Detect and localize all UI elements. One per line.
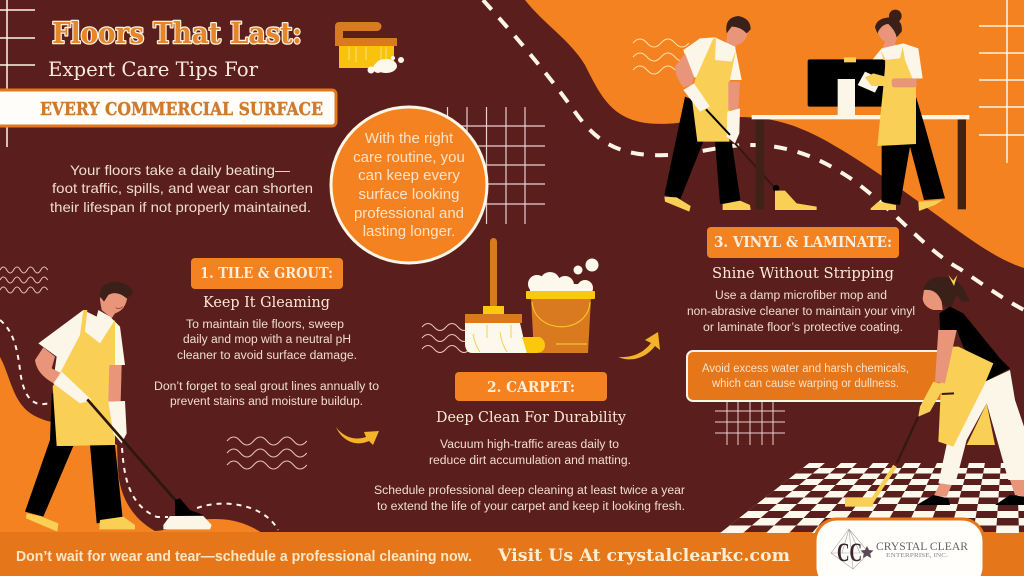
wiping cloth: [858, 72, 882, 93]
section 2 subheading: Deep Clean For Durability: [436, 410, 627, 426]
section 1 body text: daily and mop with a neutral pH: [183, 334, 351, 346]
callout circle: lasting longer.: [363, 223, 455, 240]
section 3: vinyl and laminate: [687, 227, 915, 334]
grid decoration: below callout: [715, 400, 785, 445]
section 3 label: 3. VINYL & LAMINATE:: [714, 233, 892, 251]
dashed path: bottom left: [0, 320, 278, 530]
mop stick: [87, 399, 177, 502]
banner: every commercial surface: [0, 90, 336, 126]
intro text: [50, 162, 313, 215]
warning callout: which can cause warping or dullness.: [711, 378, 899, 390]
waves: beside mop: [422, 324, 470, 352]
checkered floor: [700, 463, 1024, 533]
section 2 body text: to extend the life of your carpet and keep it looking fresh.: [377, 501, 685, 513]
handle behind hand: [942, 390, 954, 397]
mop head: [175, 498, 203, 516]
orange wave: bottom left: [0, 357, 262, 533]
mop handle: [706, 109, 730, 135]
waves: left: [0, 267, 48, 293]
dashed path: top: [483, 0, 1024, 310]
section 1: tile and grout: [154, 258, 379, 408]
head: [889, 10, 902, 22]
section 1 label: [191, 258, 343, 289]
section 3 body text: Use a damp microfiber mop and: [715, 290, 887, 302]
section 2 label: 2. CARPET:: [487, 378, 575, 396]
section 3 body text: or laminate floor’s protective coating.: [703, 322, 903, 334]
warning callout: Avoid excess water and harsh chemicals,: [702, 363, 909, 375]
pants: [882, 93, 945, 205]
gloves: [683, 83, 710, 112]
shirt: [939, 307, 1010, 382]
arrow: section 1 to 2: [336, 427, 379, 445]
figure: woman wiping monitor: [844, 10, 945, 211]
footer call to action: Don’t wait for wear and tear—schedule a professional cleaning now.: [16, 548, 472, 565]
skin ankles: [933, 483, 952, 497]
intro text: foot traffic, spills, and wear can shorten: [52, 180, 313, 196]
figure: man mopping left: [25, 282, 212, 532]
waves: top right: [633, 39, 689, 74]
section 1 body text: prevent stains and moisture buildup.: [170, 396, 363, 408]
mop pad: [845, 497, 873, 507]
shoes: [664, 197, 691, 212]
footer website: Visit Us At crystalclearkc.com: [497, 546, 790, 566]
section 1 body text: Don’t forget to seal grout lines annually to: [154, 381, 379, 393]
section 1 label: 1. TILE & GROUT:: [200, 264, 333, 282]
section 2: carpet: [374, 372, 685, 513]
right arm: [108, 365, 122, 402]
desk top: [752, 115, 969, 119]
glove: [865, 73, 892, 86]
section 2 label: [455, 372, 607, 401]
logo wordmark: CRYSTAL CLEAR: [876, 539, 968, 553]
title line: Floors That Last: Floors That Last:: [52, 16, 302, 50]
shirt: [38, 310, 125, 380]
desk with monitor: [752, 59, 969, 209]
shirt: [873, 43, 923, 79]
arrow: section 2 to 3: [618, 332, 660, 359]
footer bar: [0, 532, 1024, 576]
logo mark: CC: [837, 538, 862, 567]
figure: man mopping top: [664, 16, 817, 212]
arm: [892, 78, 917, 87]
section 1 body text: cleaner to avoid surface damage.: [177, 350, 357, 362]
grid decoration: behind circle: [430, 107, 545, 224]
logo mark: [831, 529, 874, 569]
callout circle: With the right: [365, 130, 454, 147]
apron: [53, 310, 115, 446]
pants: [664, 97, 703, 200]
callout circle: can keep every: [358, 167, 460, 184]
shirt: [683, 37, 742, 83]
shoes: [871, 202, 896, 210]
face: [923, 290, 943, 310]
section 3 body text: [687, 290, 915, 334]
warning callout: [687, 351, 960, 401]
callout circle: care routine, you: [353, 149, 465, 166]
gloves: [53, 372, 92, 403]
callout circle: surface looking: [359, 186, 459, 203]
section 2 body text: Schedule professional deep cleaning at least twice a year: [374, 485, 685, 497]
logo panel: [815, 519, 984, 576]
callout circle: professional and: [354, 205, 464, 222]
intro text: their lifespan if not properly maintained.: [50, 199, 311, 215]
shoes: [26, 513, 58, 532]
section 3 subheading: Shine Without Stripping: [712, 266, 894, 282]
desk legs: [756, 119, 764, 209]
subtitle: Expert Care Tips For: Expert Care Tips For: [48, 57, 258, 81]
pants: [938, 370, 1024, 485]
glove: [918, 382, 945, 417]
callout circle: [331, 107, 487, 263]
waves: bottom centre: [227, 437, 307, 469]
intro text: Your floors take a daily beating—: [70, 162, 290, 178]
apron: [938, 337, 993, 447]
mop pole: [897, 417, 918, 463]
right arm: [728, 82, 740, 110]
scrunchie: [948, 275, 957, 286]
grid decoration: top right: [979, 0, 1024, 163]
apron back: [967, 403, 995, 445]
apron: [692, 38, 736, 142]
footer text: [16, 546, 790, 566]
arm: [935, 330, 957, 383]
section 2 body text: [374, 439, 685, 513]
section 1 body text: To maintain tile floors, sweep: [186, 319, 344, 331]
orange wave: top right: [525, 0, 1024, 268]
shoes: [917, 495, 950, 505]
title: [0, 16, 336, 126]
cloth on monitor: [844, 57, 856, 62]
grid decoration: top left: [0, 0, 35, 147]
section 2 body text: Vacuum high-traffic areas daily to: [440, 439, 619, 451]
section 1 body text: [154, 319, 379, 408]
left arm: [675, 53, 694, 87]
head: [726, 24, 748, 50]
apron: [877, 47, 916, 146]
figure: woman mopping checker floor: [845, 275, 1024, 507]
monitor: [808, 59, 885, 107]
back pants: [25, 393, 73, 517]
section 3 label: [707, 227, 899, 258]
section 3 body text: non-abrasive cleaner to maintain your vinyl: [687, 306, 915, 318]
section 2 body text: reduce dirt accumulation and matting.: [429, 455, 631, 467]
logo subtitle: ENTERPRISE, INC.: [886, 553, 949, 559]
section 1 subheading: Keep It Gleaming: [203, 295, 330, 311]
banner: every commercial surface: EVERY COMMERCIAL SURFACE: [40, 99, 323, 120]
icon: scrub brush: [335, 22, 404, 74]
mop: [773, 185, 779, 192]
icon: mop and bucket: [465, 238, 598, 353]
hair: [923, 277, 970, 310]
arm: [35, 347, 65, 385]
head: [100, 290, 127, 318]
